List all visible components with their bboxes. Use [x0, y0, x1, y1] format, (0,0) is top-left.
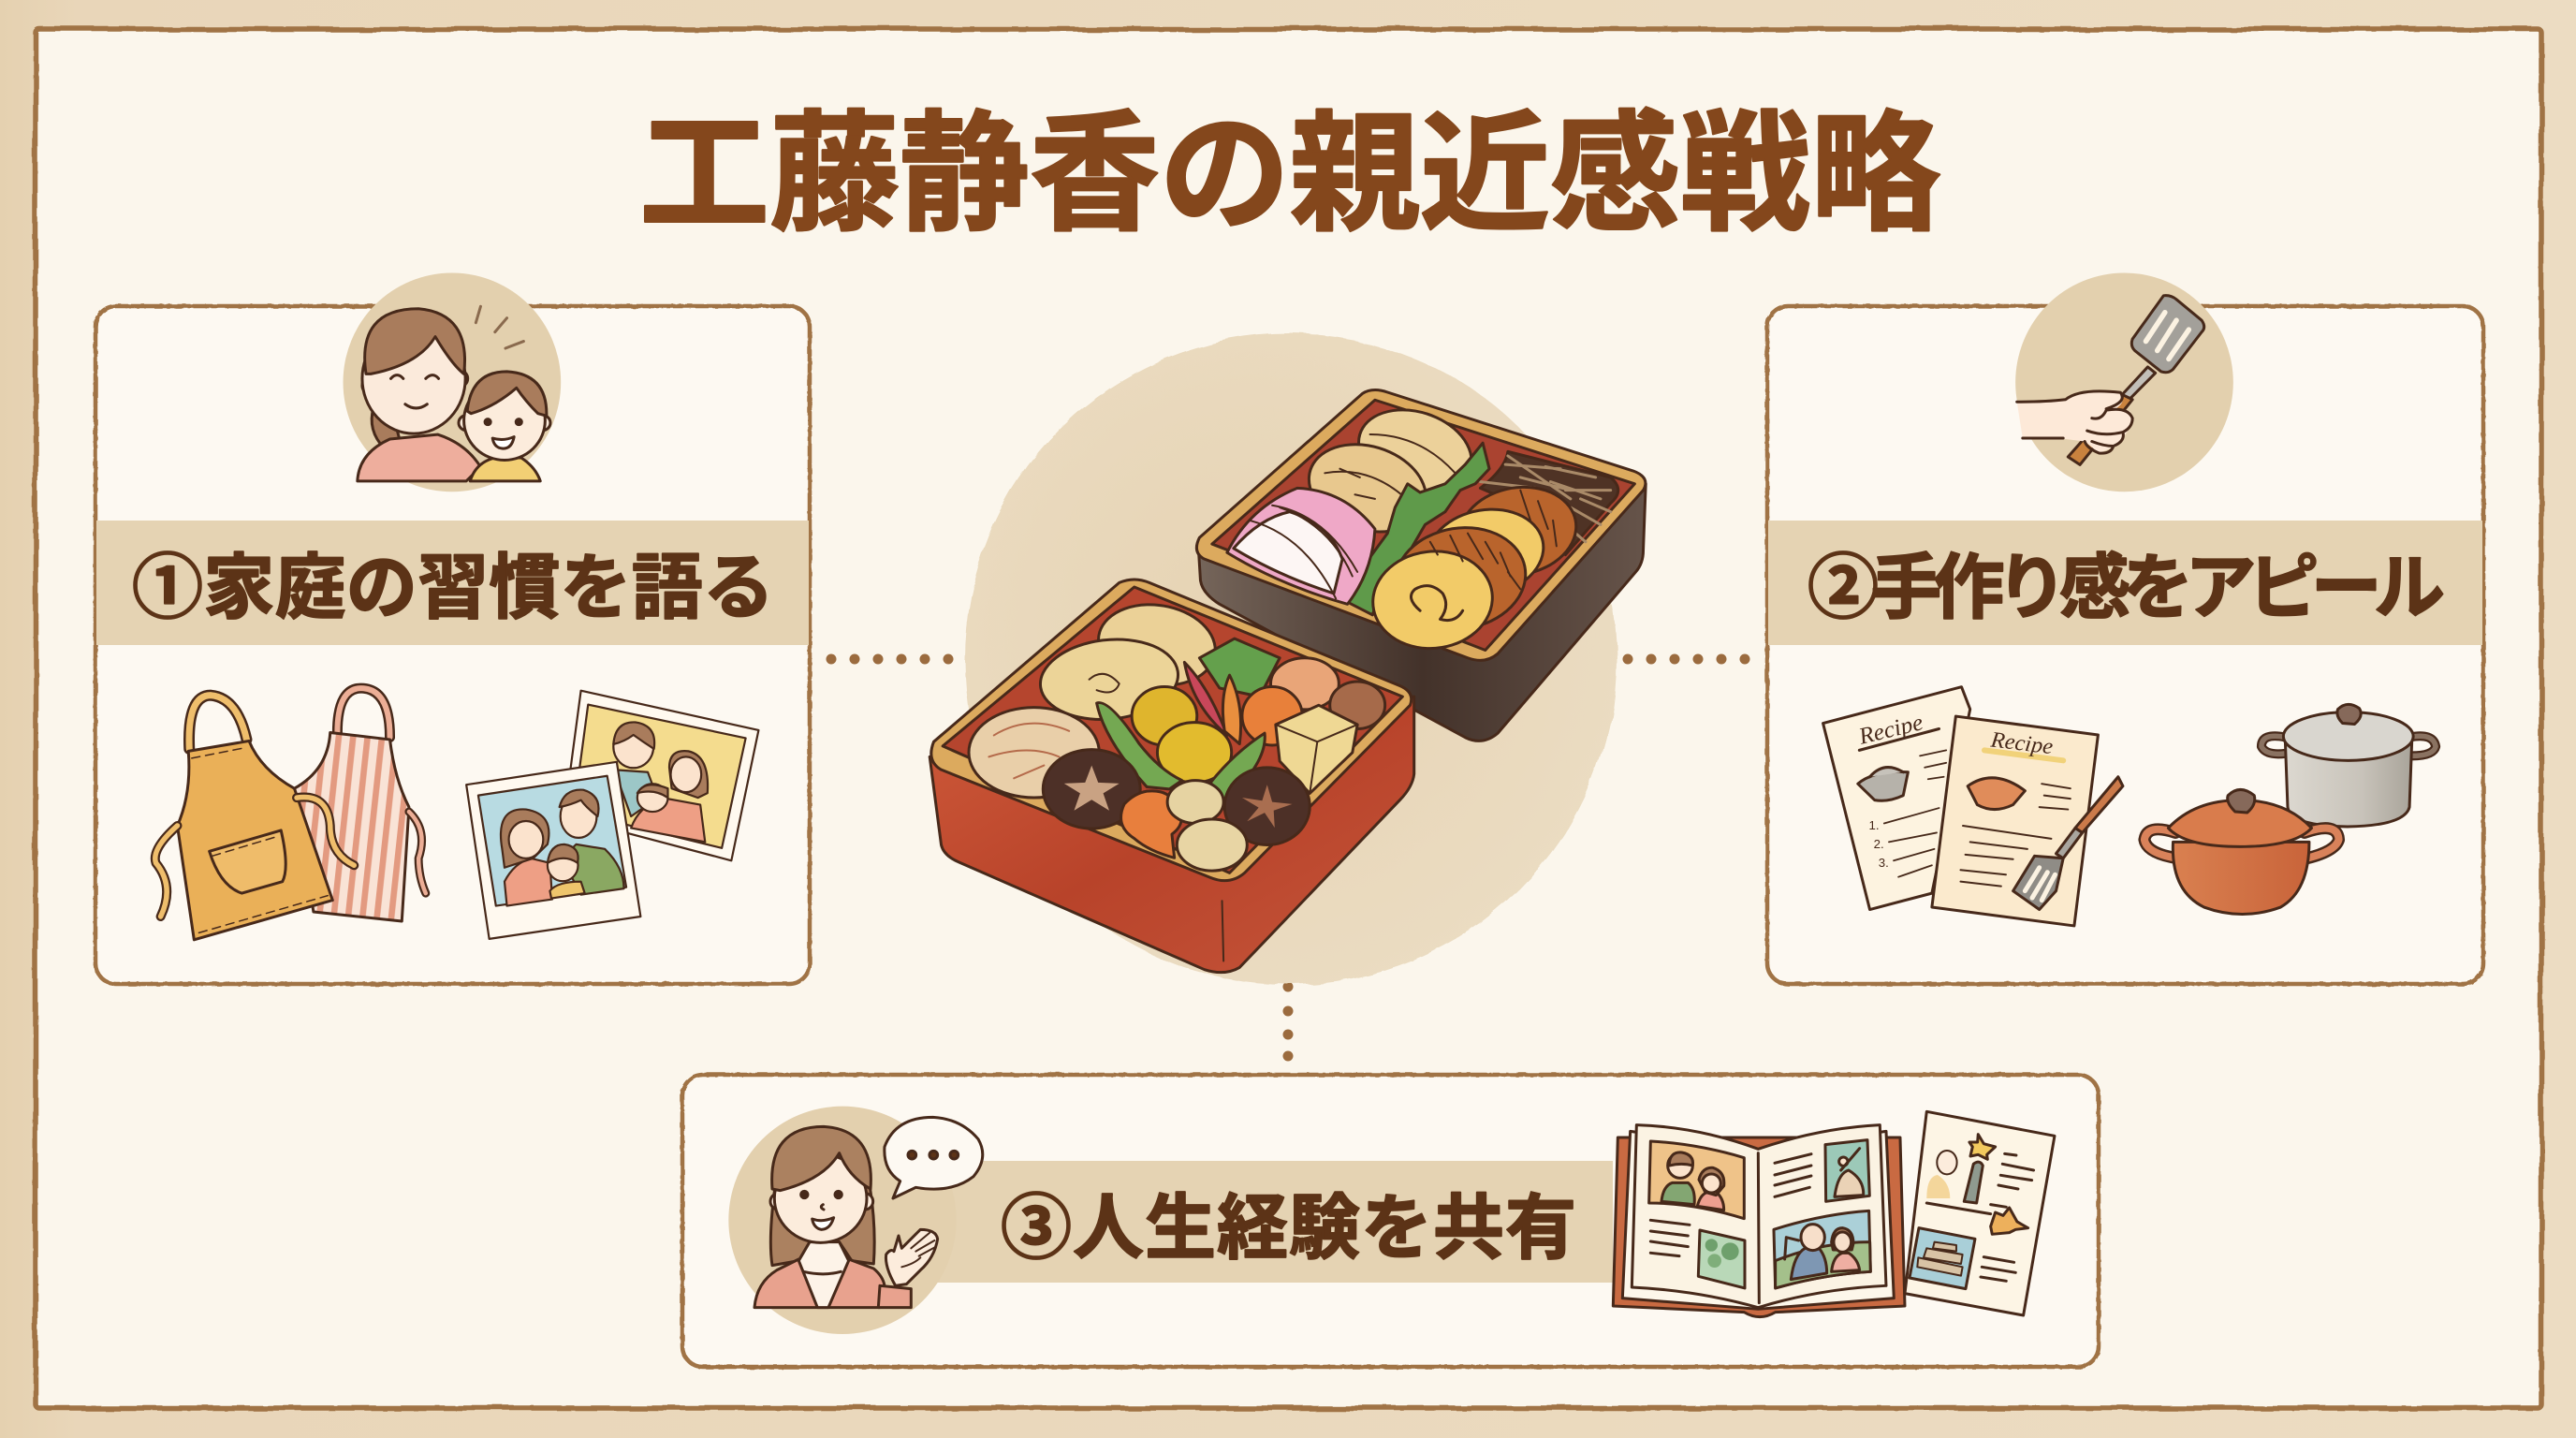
illustration: osechi jubako boxes [929, 390, 1646, 973]
panel 2 frame [1767, 306, 2483, 984]
icon badge: hand holding spatula [2015, 272, 2233, 492]
black lacquer box [1196, 390, 1646, 741]
central watercolor circle [964, 333, 1616, 985]
panel 3 band [936, 1161, 1613, 1283]
illustration: recipe sheets: Recipe [1988, 727, 2055, 759]
illustration: recipe sheets: 3. [1879, 856, 1889, 870]
panel 1 heading: ①家庭の習慣を語る [132, 549, 774, 628]
panel 3 heading: ③人生経験を共有 [1001, 1189, 1576, 1269]
illustration: aprons [155, 688, 426, 940]
panel 1: family habits [95, 272, 810, 984]
panel 2 band [1768, 521, 2482, 645]
illustration: recipe sheets: 1. [1869, 818, 1880, 832]
illustration: cooking pots [2144, 704, 2436, 914]
connector dots: left [826, 653, 953, 665]
illustration: loose album page [1905, 1111, 2055, 1315]
connector dots: bottom [1282, 981, 1294, 1062]
panel 3: sharing life experience [682, 1075, 2099, 1367]
panel 1 frame [95, 306, 810, 984]
panel 3 frame [682, 1075, 2099, 1367]
title: 工藤静香の親近感戦略 [639, 102, 1940, 247]
illustration: recipe sheets [1823, 687, 2123, 926]
illustration: photo album [1613, 1125, 1905, 1317]
illustration: family photos [466, 691, 758, 939]
illustration: recipe sheets: 2. [1874, 837, 1884, 851]
panel 1 band [96, 521, 809, 645]
red lacquer box [929, 580, 1414, 973]
icon badge: woman speaking [728, 1107, 983, 1334]
panel 2: handmade appeal [1767, 272, 2483, 984]
connector dots: right [1623, 653, 1750, 665]
icon badge: mother and child [344, 272, 561, 492]
illustration: recipe sheets: Recipe [1855, 710, 1925, 750]
panel 2 heading: ②手作り感をアピール [1808, 549, 2445, 628]
